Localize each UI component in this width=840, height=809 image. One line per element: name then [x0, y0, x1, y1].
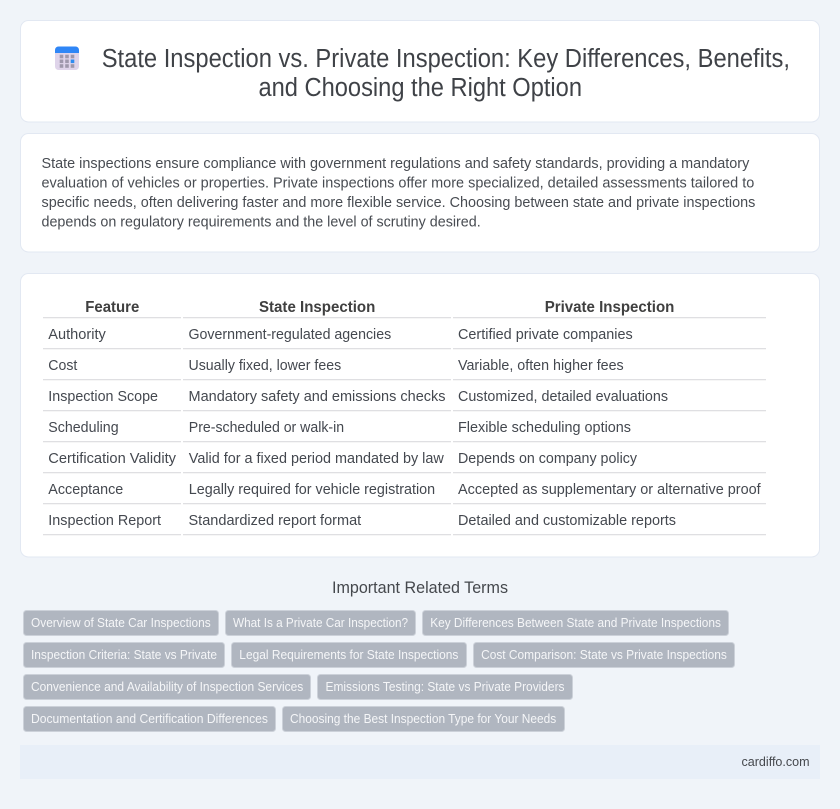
tag [24, 610, 218, 636]
tag: Cost Comparison: State vs Private Inspections [481, 647, 727, 662]
table row: Scheduling: Pre-scheduled or walk-in [189, 420, 344, 436]
table header row: Private Inspection [545, 299, 674, 316]
panel: page header [20, 20, 820, 122]
table row: Acceptance: Accepted as supplementary or alternative proof [458, 482, 762, 498]
table row: Inspection Scope: Inspection Scope [48, 389, 158, 405]
tag: Documentation and Certification Differences [31, 711, 268, 726]
tag [282, 706, 564, 732]
tag [318, 674, 572, 700]
tag: What Is a Private Car Inspection? [233, 615, 408, 630]
table header row: Feature [85, 299, 139, 316]
text block: introduction paragraph: depends on regulatory requirements and the level of scrutiny desired. [42, 214, 481, 230]
panel: comparison table [20, 274, 820, 557]
title: and Choosing the Right Option [258, 74, 582, 102]
table row: Inspection Scope: Mandatory safety and emissions checks [188, 389, 446, 405]
title [102, 45, 790, 102]
table row: Scheduling: Flexible scheduling options [458, 420, 631, 436]
table row: Inspection Scope [43, 389, 766, 411]
table row: Inspection Report: Standardized report format [188, 513, 361, 529]
tag [232, 642, 466, 668]
table row: Scheduling [43, 420, 766, 442]
table row: Inspection Report [43, 513, 766, 535]
tag: Overview of State Car Inspections [31, 615, 211, 630]
text block: introduction paragraph: evaluation of vehicles or properties. Private inspections offer more specialized, detailed assessments tailored to [42, 176, 754, 192]
text block: introduction paragraph [42, 156, 755, 230]
text block: introduction paragraph: State inspections ensure compliance with government regulations and safety standards, providing a mandatory [42, 156, 750, 172]
table row: Certification Validity: Depends on company policy [458, 451, 638, 467]
icon: calendar [55, 46, 79, 70]
tag [226, 610, 416, 636]
table row: Inspection Report: Inspection Report [48, 513, 161, 529]
tag: Key Differences Between State and Private Inspections [430, 615, 721, 630]
title: State Inspection vs. Private Inspection: Key Differences, Benefits, [102, 45, 790, 73]
table row: Acceptance [43, 482, 766, 504]
tag: Convenience and Availability of Inspection Services [31, 679, 303, 694]
table row: Authority: Certified private companies [458, 327, 633, 343]
table row: Cost: Usually fixed, lower fees [188, 358, 341, 374]
table header row: State Inspection [259, 299, 375, 316]
table row: Scheduling: Scheduling [48, 420, 119, 436]
tag: Legal Requirements for State Inspections [239, 647, 458, 662]
table row: Authority: Government-regulated agencies [188, 327, 391, 343]
table row: Authority: Authority [48, 327, 106, 343]
table row: Acceptance: Legally required for vehicle registration [189, 482, 435, 498]
table row: Certification Validity: Valid for a fixed period mandated by law [189, 451, 444, 467]
tag [24, 674, 310, 700]
tag: Emissions Testing: State vs Private Providers [326, 679, 564, 694]
heading: related terms: Important Related Terms [332, 579, 508, 597]
table header row [43, 299, 766, 318]
tag [474, 642, 734, 668]
table row: Cost: Cost [48, 358, 77, 374]
table row: Authority [43, 327, 766, 349]
tag [24, 706, 276, 732]
footer [20, 745, 820, 779]
tag [24, 642, 224, 668]
tag [422, 610, 728, 636]
table row: Inspection Scope: Customized, detailed evaluations [458, 389, 668, 405]
table row: Cost: Variable, often higher fees [458, 358, 624, 374]
table row: Certification Validity: Certification Validity [48, 451, 177, 467]
tag: Choosing the Best Inspection Type for Your Needs [290, 711, 556, 726]
table row: Certification Validity [43, 451, 766, 473]
panel: related term tags [24, 610, 734, 732]
table row: Inspection Report: Detailed and customizable reports [458, 513, 676, 529]
table row: Acceptance: Acceptance [48, 482, 123, 498]
table row: Cost [43, 358, 766, 380]
panel: introduction [20, 134, 820, 252]
text block: introduction paragraph: specific needs, often delivering faster and more flexible service. Choosing between state and private inspections [42, 195, 755, 211]
tag: Inspection Criteria: State vs Private [31, 647, 217, 662]
footer: cardiffo.com [742, 754, 810, 769]
